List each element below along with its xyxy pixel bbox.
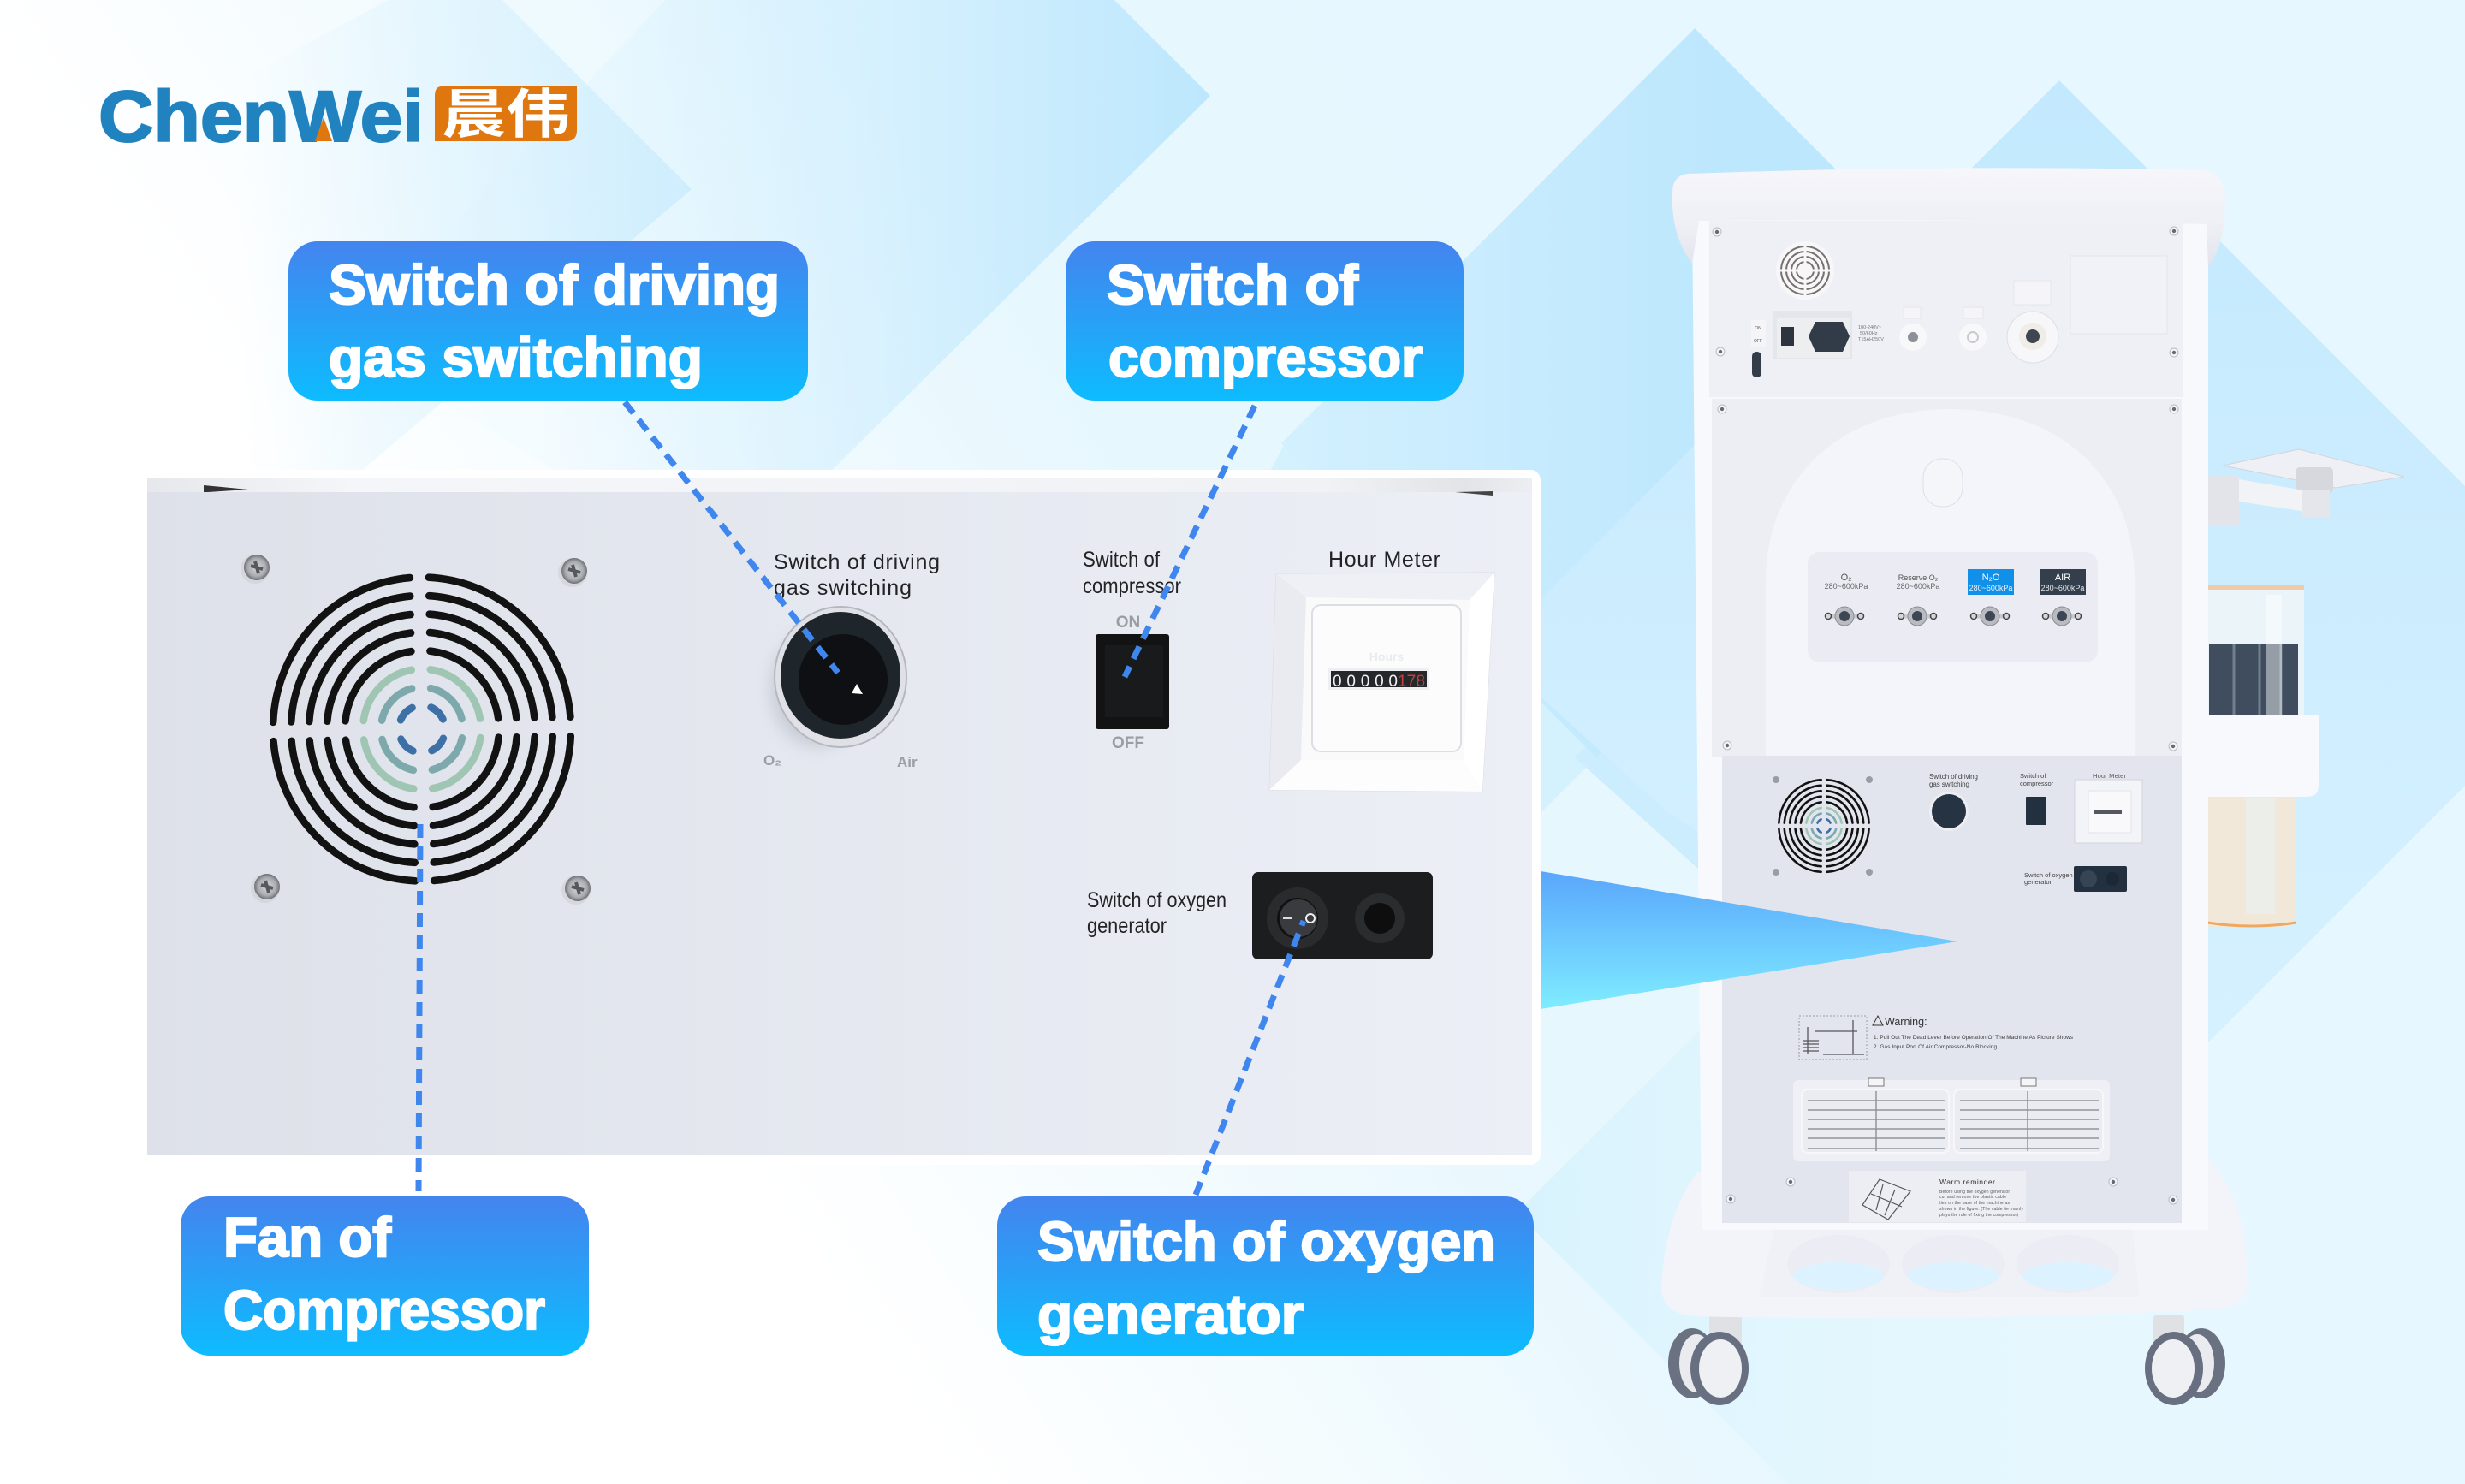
gas inlet labels: Reserve O₂: [1898, 573, 1939, 582]
dashed leader: oxygen generator switch: [1196, 921, 1304, 1195]
warning label: 1. Pull Out The Dead Lever Before Operation Of The Machine As Picture Shows: [1874, 1035, 2073, 1041]
callout: fan of compressor: Compressor: [223, 1279, 545, 1341]
callout: fan of compressor: Fan of: [223, 1206, 391, 1268]
gas switching knob: [770, 607, 906, 747]
compressor label: compressor: [1083, 574, 1181, 598]
gas switching label: Switch of driving: [774, 550, 940, 574]
gas inlet labels: [1825, 569, 2086, 595]
compressor rocker switch: ON: [1116, 614, 1140, 632]
cap: [1672, 168, 2225, 267]
callout: switch of oxygen generator: [997, 1196, 1534, 1356]
gas inlet labels: N₂O: [1982, 573, 2000, 583]
dashed leader: driving gas switch: [625, 402, 838, 673]
logo: ChenWei: [98, 76, 577, 157]
hour meter: 178: [1398, 673, 1425, 691]
gas outlets: [1899, 281, 2058, 363]
O2 and Air labels: O₂: [763, 752, 781, 769]
lower jar: [2207, 796, 2296, 928]
gas switching label: [774, 550, 940, 600]
callout: switch of compressor: Switch of: [1107, 253, 1358, 316]
power module: 100-240V~: [1858, 325, 1881, 330]
power module: T15AH250V: [1858, 337, 1884, 342]
callout: switch of oxygen generator: Switch of oxygen: [1037, 1210, 1495, 1273]
logo: ChenWei: 晨伟: [442, 86, 570, 145]
warm reminder label: shown in the figure. (The cable tie mainly: [1939, 1207, 2023, 1212]
lower panel: compressor controls miniature: Switch of driving: [1929, 773, 1978, 781]
lower panel: compressor controls miniature: [1722, 756, 2182, 1223]
machine: full anaesthesia unit rear view: [1661, 168, 2404, 1405]
panel: compressor control close-up: [147, 470, 1541, 1165]
gas inlet labels: 280~600kPa: [2041, 584, 2084, 592]
warning label: [1799, 1016, 2073, 1060]
callout: switch of compressor: [1066, 241, 1464, 401]
hour meter: Hour Meter: [1328, 548, 1440, 572]
warm reminder label: ties on the base of the machine as: [1939, 1201, 2010, 1206]
power module: ON: [1755, 326, 1761, 331]
compressor rocker switch: [1096, 614, 1169, 752]
top connector panel: [1709, 221, 2183, 397]
callout: switch of driving gas switching: Switch of driving: [329, 253, 780, 316]
warning label: Warning:: [1885, 1016, 1927, 1028]
oxygen generator label: Switch of oxygen: [1087, 888, 1227, 912]
oxygen generator label: [1087, 888, 1227, 938]
callout: switch of compressor: compressor: [1108, 326, 1423, 389]
lower panel: compressor controls miniature: generator: [2024, 878, 2052, 886]
support arm and tray: [2208, 449, 2404, 526]
lower panel: compressor controls miniature: Switch of: [2020, 772, 2046, 780]
lower panel: compressor controls miniature: compressor: [2020, 780, 2054, 787]
O2 and Air labels: [763, 752, 918, 770]
gas inlet labels: O₂: [1841, 573, 1851, 583]
power module: OFF: [1754, 339, 1762, 344]
dashed leader: fan: [419, 824, 420, 1191]
callout: switch of driving gas switching: [288, 241, 808, 401]
callout: fan of compressor: [181, 1196, 589, 1356]
hour meter: 00000: [1333, 673, 1398, 691]
lower panel: compressor controls miniature: Switch of oxygen: [2024, 871, 2073, 879]
warning label: 2. Gas Input Port Of Air Compressor-No Blocking: [1874, 1044, 1997, 1050]
gas inlet labels: 280~600kPa: [1969, 584, 2012, 592]
gas inlet labels: AIR: [2055, 573, 2070, 583]
base with cylinder holders: [1661, 1160, 2248, 1318]
power module: [1751, 311, 1884, 377]
O2 and Air labels: Air: [897, 754, 918, 770]
hour meter: [1269, 548, 1494, 792]
dashed leader: compressor switch: [1125, 406, 1255, 677]
panel fixing screws: [1713, 227, 2178, 1204]
gas inlet labels: 280~600kPa: [1897, 582, 1939, 591]
ventilation grille: [1793, 1078, 2110, 1161]
oxygen generator label: generator: [1087, 914, 1167, 938]
upper bellows jar: [2207, 585, 2304, 719]
hour meter: Hours: [1369, 650, 1404, 663]
compressor label: [1083, 548, 1181, 598]
callout: switch of driving gas switching: gas switching: [329, 326, 703, 389]
power module: 50/60Hz: [1860, 331, 1878, 336]
screws: [241, 555, 591, 905]
gas inlet fittings: [1825, 607, 2082, 626]
warm reminder label: plays the role of fixing the compressor): [1939, 1213, 2018, 1218]
gas inlet labels: 280~600kPa: [1825, 582, 1868, 591]
oxygen generator switch plate: [1252, 872, 1433, 959]
jar housing: [2207, 715, 2319, 797]
middle panel with arch and gas inlets: [1712, 399, 2182, 757]
warm reminder label: Warm reminder: [1939, 1178, 1995, 1186]
warm reminder label: [1849, 1171, 2026, 1222]
warm reminder label: Before using the oxygen generator: [1939, 1190, 2010, 1195]
body columns: [1692, 214, 2208, 1230]
callout: switch of oxygen generator: generator: [1037, 1283, 1304, 1345]
gas switching label: gas switching: [774, 576, 912, 600]
logo: ChenWei: ChenWei: [98, 76, 424, 157]
lower panel: compressor controls miniature: gas switching: [1929, 781, 1969, 788]
lower panel: compressor controls miniature: Hour Meter: [2093, 772, 2126, 780]
zoom pointer triangle: [1541, 871, 1957, 1009]
casters: [1668, 1315, 2225, 1405]
compressor label: Switch of: [1083, 548, 1160, 572]
compressor rocker switch: OFF: [1112, 734, 1144, 752]
fan grille: [270, 575, 573, 883]
speaker grille: [1776, 241, 1834, 300]
warm reminder label: cut and remove the plastic cable: [1939, 1195, 2006, 1200]
